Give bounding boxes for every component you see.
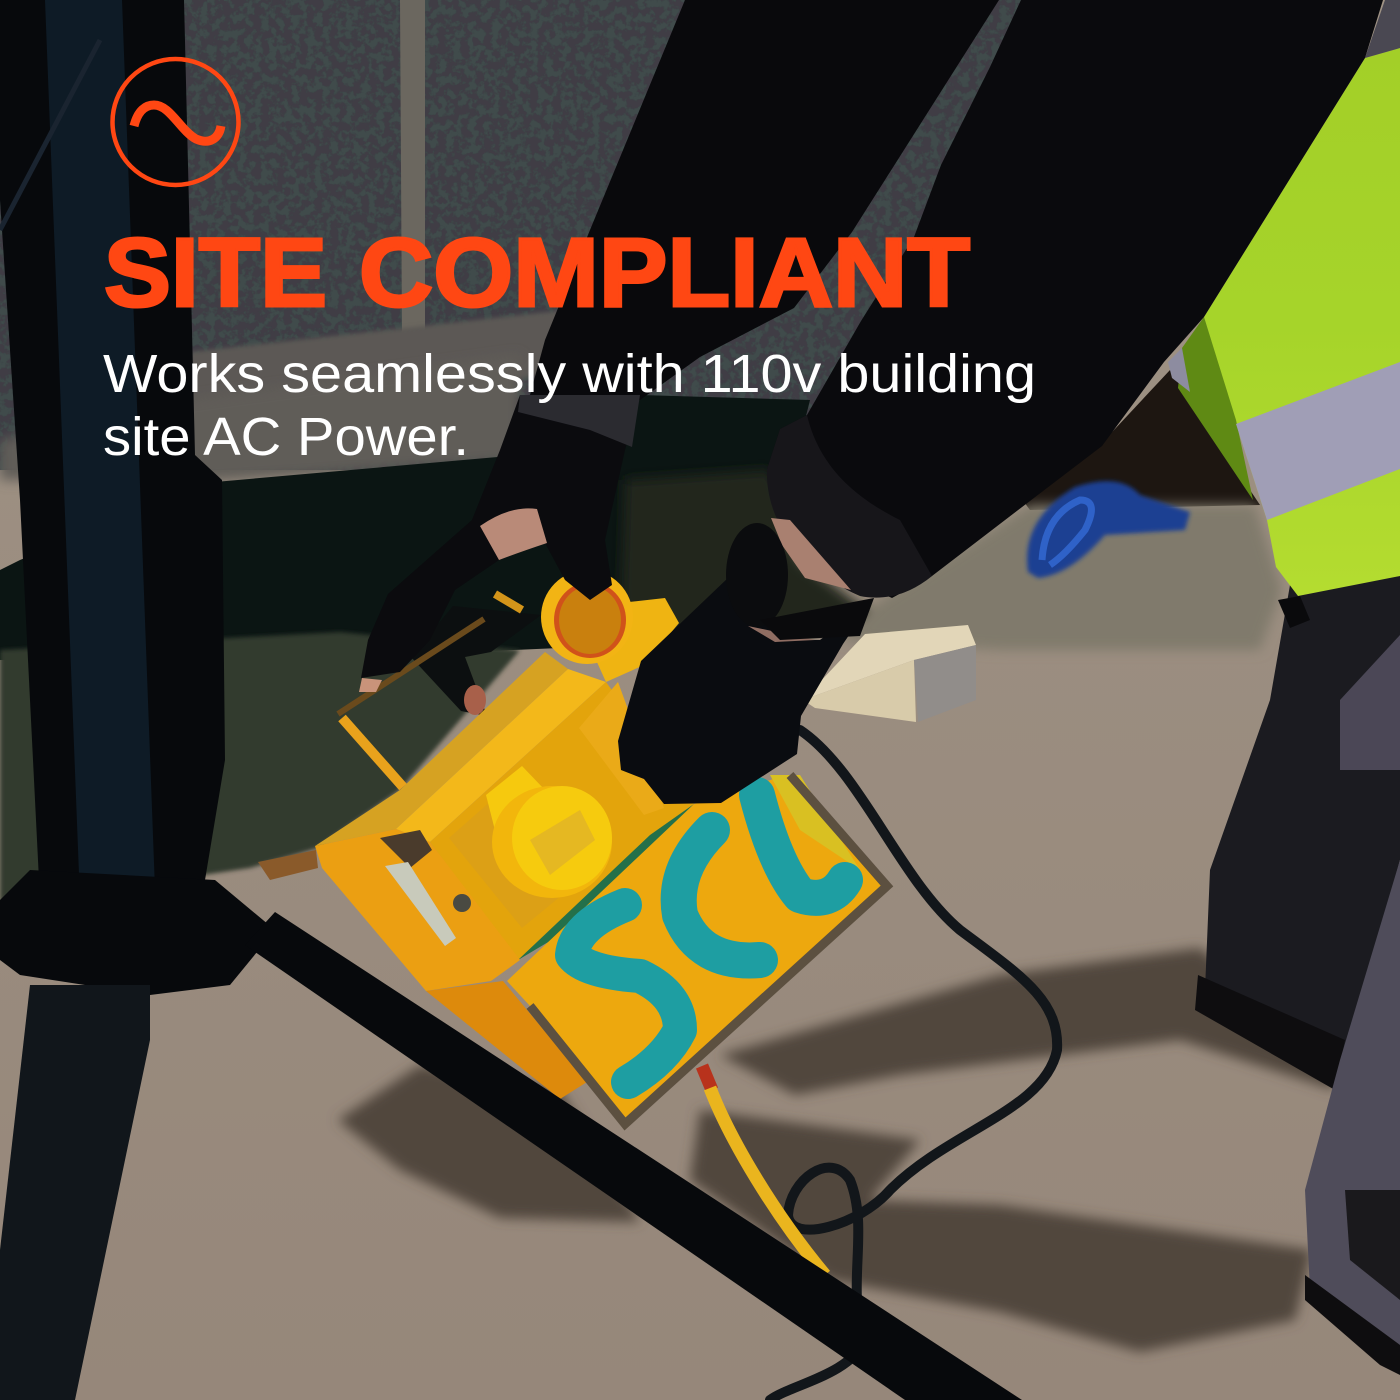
title: SITE (104, 218, 327, 327)
description text: site AC Power. (103, 407, 469, 467)
box top face (315, 652, 568, 846)
tripod (0, 0, 1022, 1400)
right gloved hand and watch (618, 518, 874, 804)
description text (103, 344, 1036, 467)
left side face (315, 829, 520, 991)
protective socket cap (541, 570, 633, 664)
cap hinge (596, 598, 679, 682)
lower face (426, 981, 587, 1099)
blue rope on the floor (1027, 481, 1190, 578)
yellow plug (449, 766, 612, 928)
worker's arms (530, 0, 1383, 598)
second socket plate (579, 682, 664, 815)
recessed socket face (430, 682, 694, 960)
hi-vis vest (1168, 0, 1400, 596)
title (104, 218, 970, 327)
icon: AC sine wave in circle (112, 59, 238, 185)
title: COMPLIANT (359, 218, 970, 327)
left hand rear fingers (411, 606, 541, 716)
carry handle (338, 594, 522, 787)
worker's leg (1195, 575, 1400, 1375)
foam block on the floor (803, 625, 976, 722)
yellow cable (702, 1066, 825, 1275)
painted panel with teal lettering (507, 775, 887, 1124)
yellow transformer box (315, 594, 694, 1099)
floor shadows (338, 948, 1335, 1352)
black cable (770, 730, 1057, 1400)
description text: Works seamlessly with 110v building (103, 344, 1036, 404)
left gloved hand (359, 395, 640, 692)
